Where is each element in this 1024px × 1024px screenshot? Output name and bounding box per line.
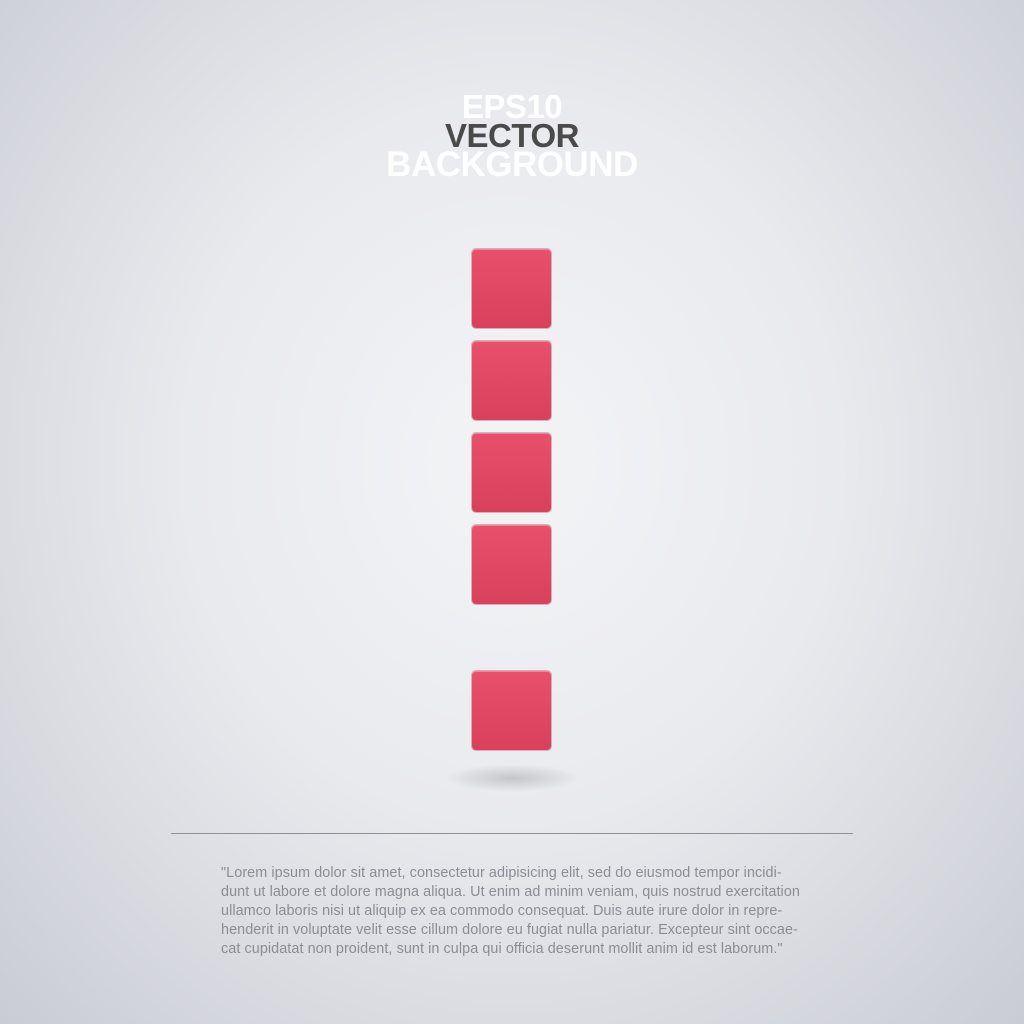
paragraph text: cat cupidatat non proident, sunt in culpa qui officia deserunt mollit anim id est laborum." [221, 941, 783, 957]
square 5 (dot) [472, 671, 551, 750]
title line: EPS10: EPS10 [462, 88, 562, 125]
shadow [445, 764, 580, 792]
title line: BACKGROUND: BACKGROUND [386, 145, 638, 184]
square 1 [472, 249, 551, 328]
divider [171, 833, 853, 834]
paragraph text: "Lorem ipsum dolor sit amet, consectetur adipisicing elit, sed do eiusmod tempor incidi- [221, 865, 782, 881]
paragraph text [221, 865, 800, 957]
paragraph text: ullamco laboris nisi ut aliquip ex ea commodo consequat. Duis aute irure dolor in repre- [221, 903, 782, 919]
paragraph text: henderit in voluptate velit esse cillum dolore eu fugiat nulla pariatur. Excepteur sint occae- [221, 922, 798, 938]
title [386, 88, 638, 184]
title line: VECTOR: VECTOR [445, 117, 579, 154]
square 3 [472, 433, 551, 512]
exclamation mark icon [460, 767, 564, 789]
square 2 [472, 341, 551, 420]
paragraph text: dunt ut labore et dolore magna aliqua. Ut enim ad minim veniam, quis nostrud exercitation [221, 884, 800, 900]
square 4 [472, 525, 551, 604]
